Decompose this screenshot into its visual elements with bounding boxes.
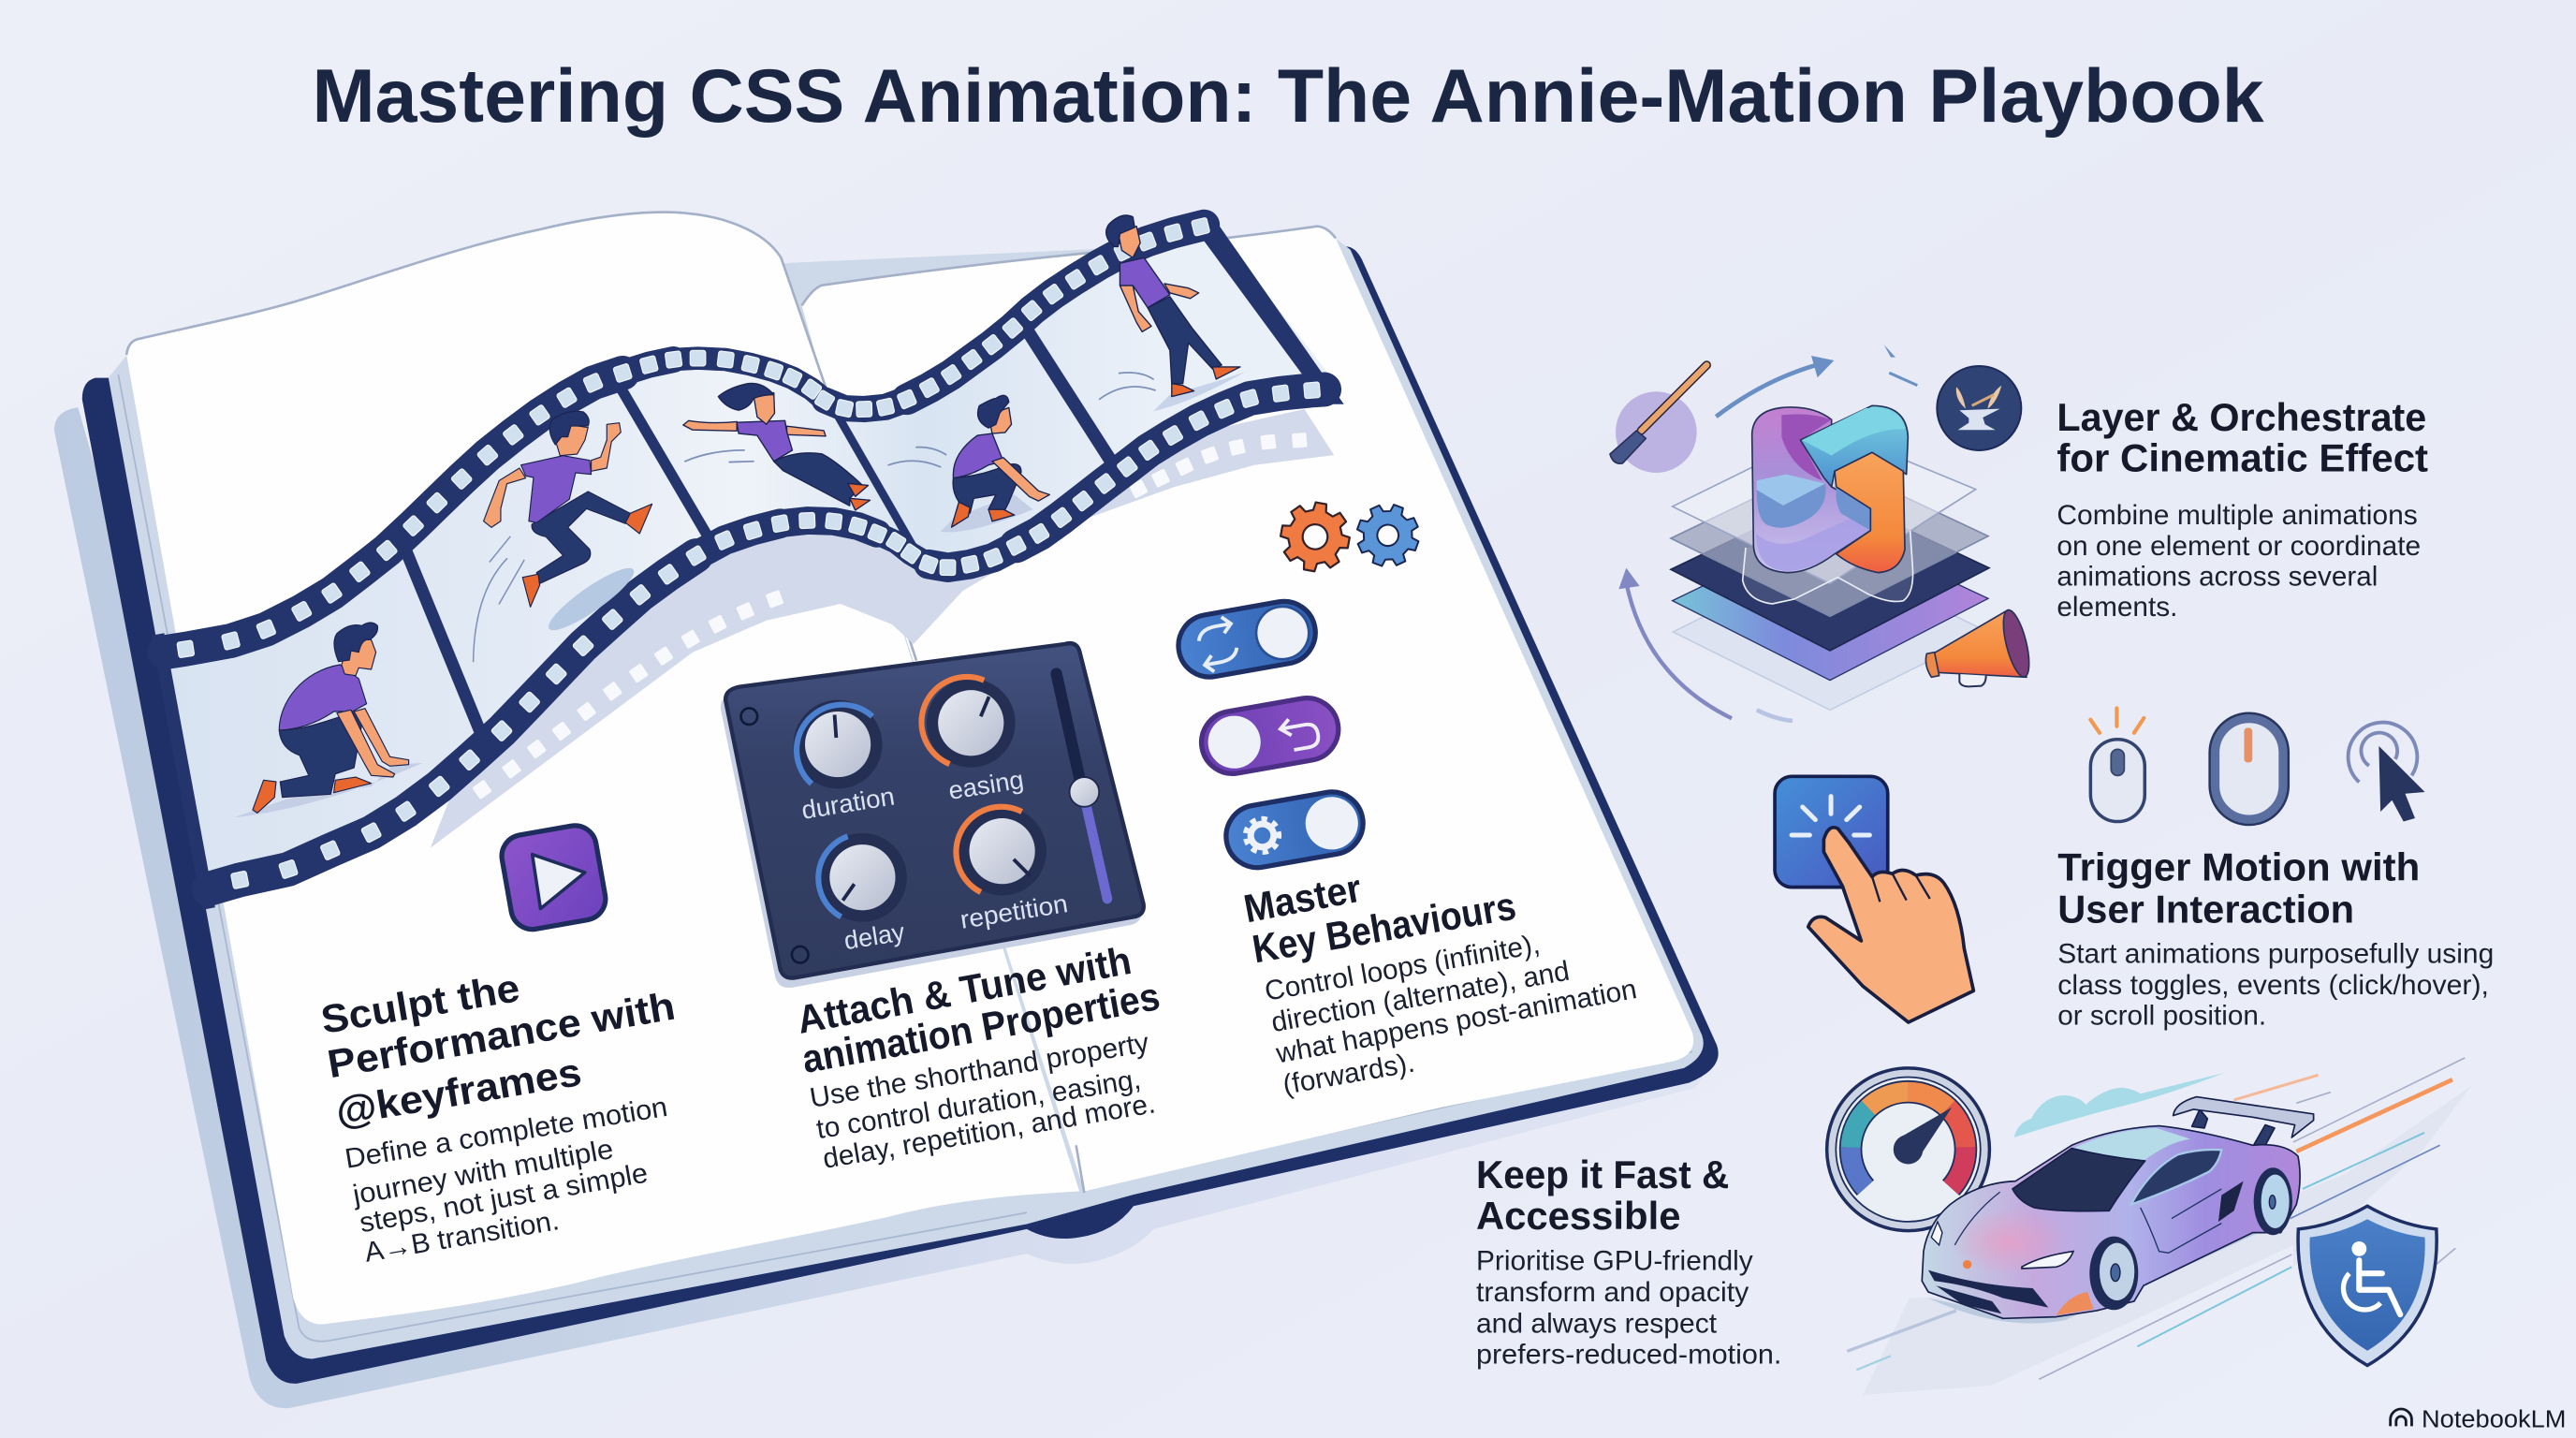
body: fast: prefers-reduced-motion. <box>1476 1340 1781 1371</box>
mixer panel <box>721 643 1144 988</box>
teal loop <box>1800 405 1908 487</box>
illustration: layered stack <box>1610 345 2034 721</box>
arrow: upper orbit <box>1716 345 1917 417</box>
arrow: lower orbit <box>1618 568 1793 721</box>
heading: layer: for Cinematic Effect <box>2056 436 2428 480</box>
slider <box>1057 674 1107 899</box>
figure 4: landing crouch <box>888 395 1049 532</box>
knob: repetition <box>956 807 1070 934</box>
toggle: loop <box>1174 596 1321 682</box>
body: animation properties: delay, repetition, and more. <box>821 1088 1158 1175</box>
text: layer and orchestrate <box>2056 395 2428 623</box>
toggle: settings <box>1222 787 1368 873</box>
orange loop <box>1835 452 1905 573</box>
heading: fast <box>1476 1152 1729 1238</box>
layer diamonds <box>1671 429 1989 710</box>
icon: pressed mouse <box>2210 713 2289 825</box>
heading: key behaviours: Master <box>1240 866 1365 931</box>
body: trigger: class toggles, events (click/hover), <box>2057 970 2489 1001</box>
heading: key behaviours: Key Behaviours <box>1250 884 1519 971</box>
windshield <box>2012 1149 2145 1211</box>
grille <box>1928 1270 2048 1313</box>
toggle: direction <box>1196 693 1343 779</box>
NotebookLM logo: NotebookLM <box>2422 1404 2566 1432</box>
heading: animation properties: Attach & Tune with <box>794 938 1134 1042</box>
right page <box>801 227 1693 1191</box>
body: key behaviours: direction (alternate), and <box>1269 956 1572 1038</box>
body: key behaviours: Control loops (infinite), <box>1263 929 1542 1007</box>
title: Mastering CSS Animation: The Annie-Mation Playbook <box>312 54 2264 139</box>
corner screws <box>741 708 809 962</box>
icon: blue button with pointing hand <box>1775 776 1973 1022</box>
icon: anvil badge <box>1937 366 2021 450</box>
text: trigger motion <box>2057 845 2494 1031</box>
body: fast: Prioritise GPU-friendly <box>1476 1246 1753 1277</box>
heading: trigger: User Interaction <box>2057 887 2354 931</box>
film strip <box>157 213 1344 909</box>
icon: accessibility shield <box>2298 1206 2437 1365</box>
figure 1: crouching runner <box>234 623 423 817</box>
book cover <box>82 246 1719 1384</box>
body: layer <box>2056 500 2421 623</box>
knob: delay <box>818 833 907 955</box>
film strip shadow <box>431 409 1334 848</box>
side window <box>2131 1150 2221 1205</box>
page edge lines <box>118 374 1692 1342</box>
heading: keyframes: Sculpt the <box>317 965 522 1042</box>
purple glass tube <box>1752 407 1870 573</box>
headlight <box>2022 1252 2073 1269</box>
glass base outline <box>1743 531 1913 604</box>
body: key behaviours <box>1263 929 1639 1101</box>
body: keyframes: Define a complete motion <box>343 1092 669 1175</box>
illustration: sports car <box>1922 1097 2314 1318</box>
knob: duration: duration <box>799 782 897 825</box>
body: fast: transform and opacity <box>1476 1277 1749 1308</box>
body: animation properties: Use the shorthand property <box>808 1027 1151 1114</box>
car body <box>1922 1126 2300 1318</box>
knob: easing <box>921 677 1026 805</box>
text: keep it fast <box>1476 1152 1781 1371</box>
text: sculpt the performance <box>317 965 679 1269</box>
figure 2: jumping runner <box>474 411 652 662</box>
body: animation properties: to control duration, easing, <box>814 1064 1143 1145</box>
heading: keyframes: @keyframes <box>332 1049 584 1134</box>
open book <box>54 213 1719 1408</box>
knob: duration <box>794 700 897 825</box>
body: key behaviours: what happens post-animation <box>1273 974 1639 1070</box>
heading: animation properties: animation Properties <box>798 974 1163 1081</box>
body: keyframes: A→B transition. <box>362 1205 562 1269</box>
icon: play button <box>499 822 608 932</box>
top sprocket holes <box>172 224 1212 651</box>
icon: megaphone <box>1925 608 2034 686</box>
book drop shadow <box>54 407 1719 1408</box>
film frames <box>159 224 1340 888</box>
knob: delay: delay <box>842 917 907 955</box>
body: layer: elements. <box>2056 592 2177 623</box>
body: trigger: Start animations purposefully using <box>2057 938 2494 969</box>
icon: paintbrush <box>1610 365 1706 473</box>
frame separators <box>157 634 209 909</box>
knob: repetition: repetition <box>959 888 1070 934</box>
body: layer: on one element or coordinate <box>2056 531 2421 562</box>
icon: blue gear <box>1348 496 1427 575</box>
figure 5: walking away <box>1100 215 1254 411</box>
spoiler <box>2174 1097 2314 1149</box>
body: trigger <box>2057 938 2494 1031</box>
knob: easing: easing <box>946 765 1026 805</box>
roof <box>2073 1128 2190 1161</box>
left page <box>126 213 1079 1325</box>
text: attach and tune <box>794 938 1163 1175</box>
icon: orange gear <box>1276 497 1354 577</box>
heading: keyframes: Performance with <box>324 984 679 1086</box>
body: trigger: or scroll position. <box>2057 1000 2266 1031</box>
heading: layer <box>2056 395 2428 480</box>
heading: trigger <box>2057 845 2420 931</box>
rear wheel <box>2254 1167 2292 1235</box>
icon: speedometer <box>1827 1068 1989 1231</box>
front wheel <box>2089 1237 2138 1310</box>
body: layer: animations across several <box>2056 562 2378 593</box>
page block edges <box>109 238 1704 1358</box>
top film band <box>165 225 1204 653</box>
icon: mouse with click rays <box>2090 708 2144 822</box>
body: keyframes: journey with multiple <box>349 1134 616 1211</box>
body: keyframes: steps, not just a simple <box>358 1158 650 1239</box>
heading: keyframes <box>317 965 679 1134</box>
heading: trigger: Trigger Motion with <box>2057 845 2420 889</box>
text: master key behaviours <box>1240 866 1639 1101</box>
body: fast: and always respect <box>1476 1308 1718 1339</box>
figure 3: mid-air stretch <box>683 383 871 510</box>
body: fast <box>1476 1246 1781 1371</box>
bottom film band <box>209 389 1325 889</box>
bottom sprocket holes <box>227 389 1325 882</box>
body: keyframes <box>343 1092 669 1269</box>
side vent and door <box>1954 1181 2244 1253</box>
heading: layer: Layer & Orchestrate <box>2056 395 2426 439</box>
heading: fast: Keep it Fast & <box>1476 1152 1729 1196</box>
speed cloud <box>2014 1073 2225 1137</box>
page outlines and spine crease <box>126 213 1336 1193</box>
body: animation properties <box>808 1027 1158 1175</box>
body: layer: Combine multiple animations <box>2056 500 2418 531</box>
illustration: road and speed lines <box>1847 1058 2471 1395</box>
icon: cursor with ripple <box>2349 723 2425 822</box>
body: key behaviours: (forwards). <box>1281 1048 1417 1101</box>
heading: fast: Accessible <box>1476 1194 1680 1238</box>
